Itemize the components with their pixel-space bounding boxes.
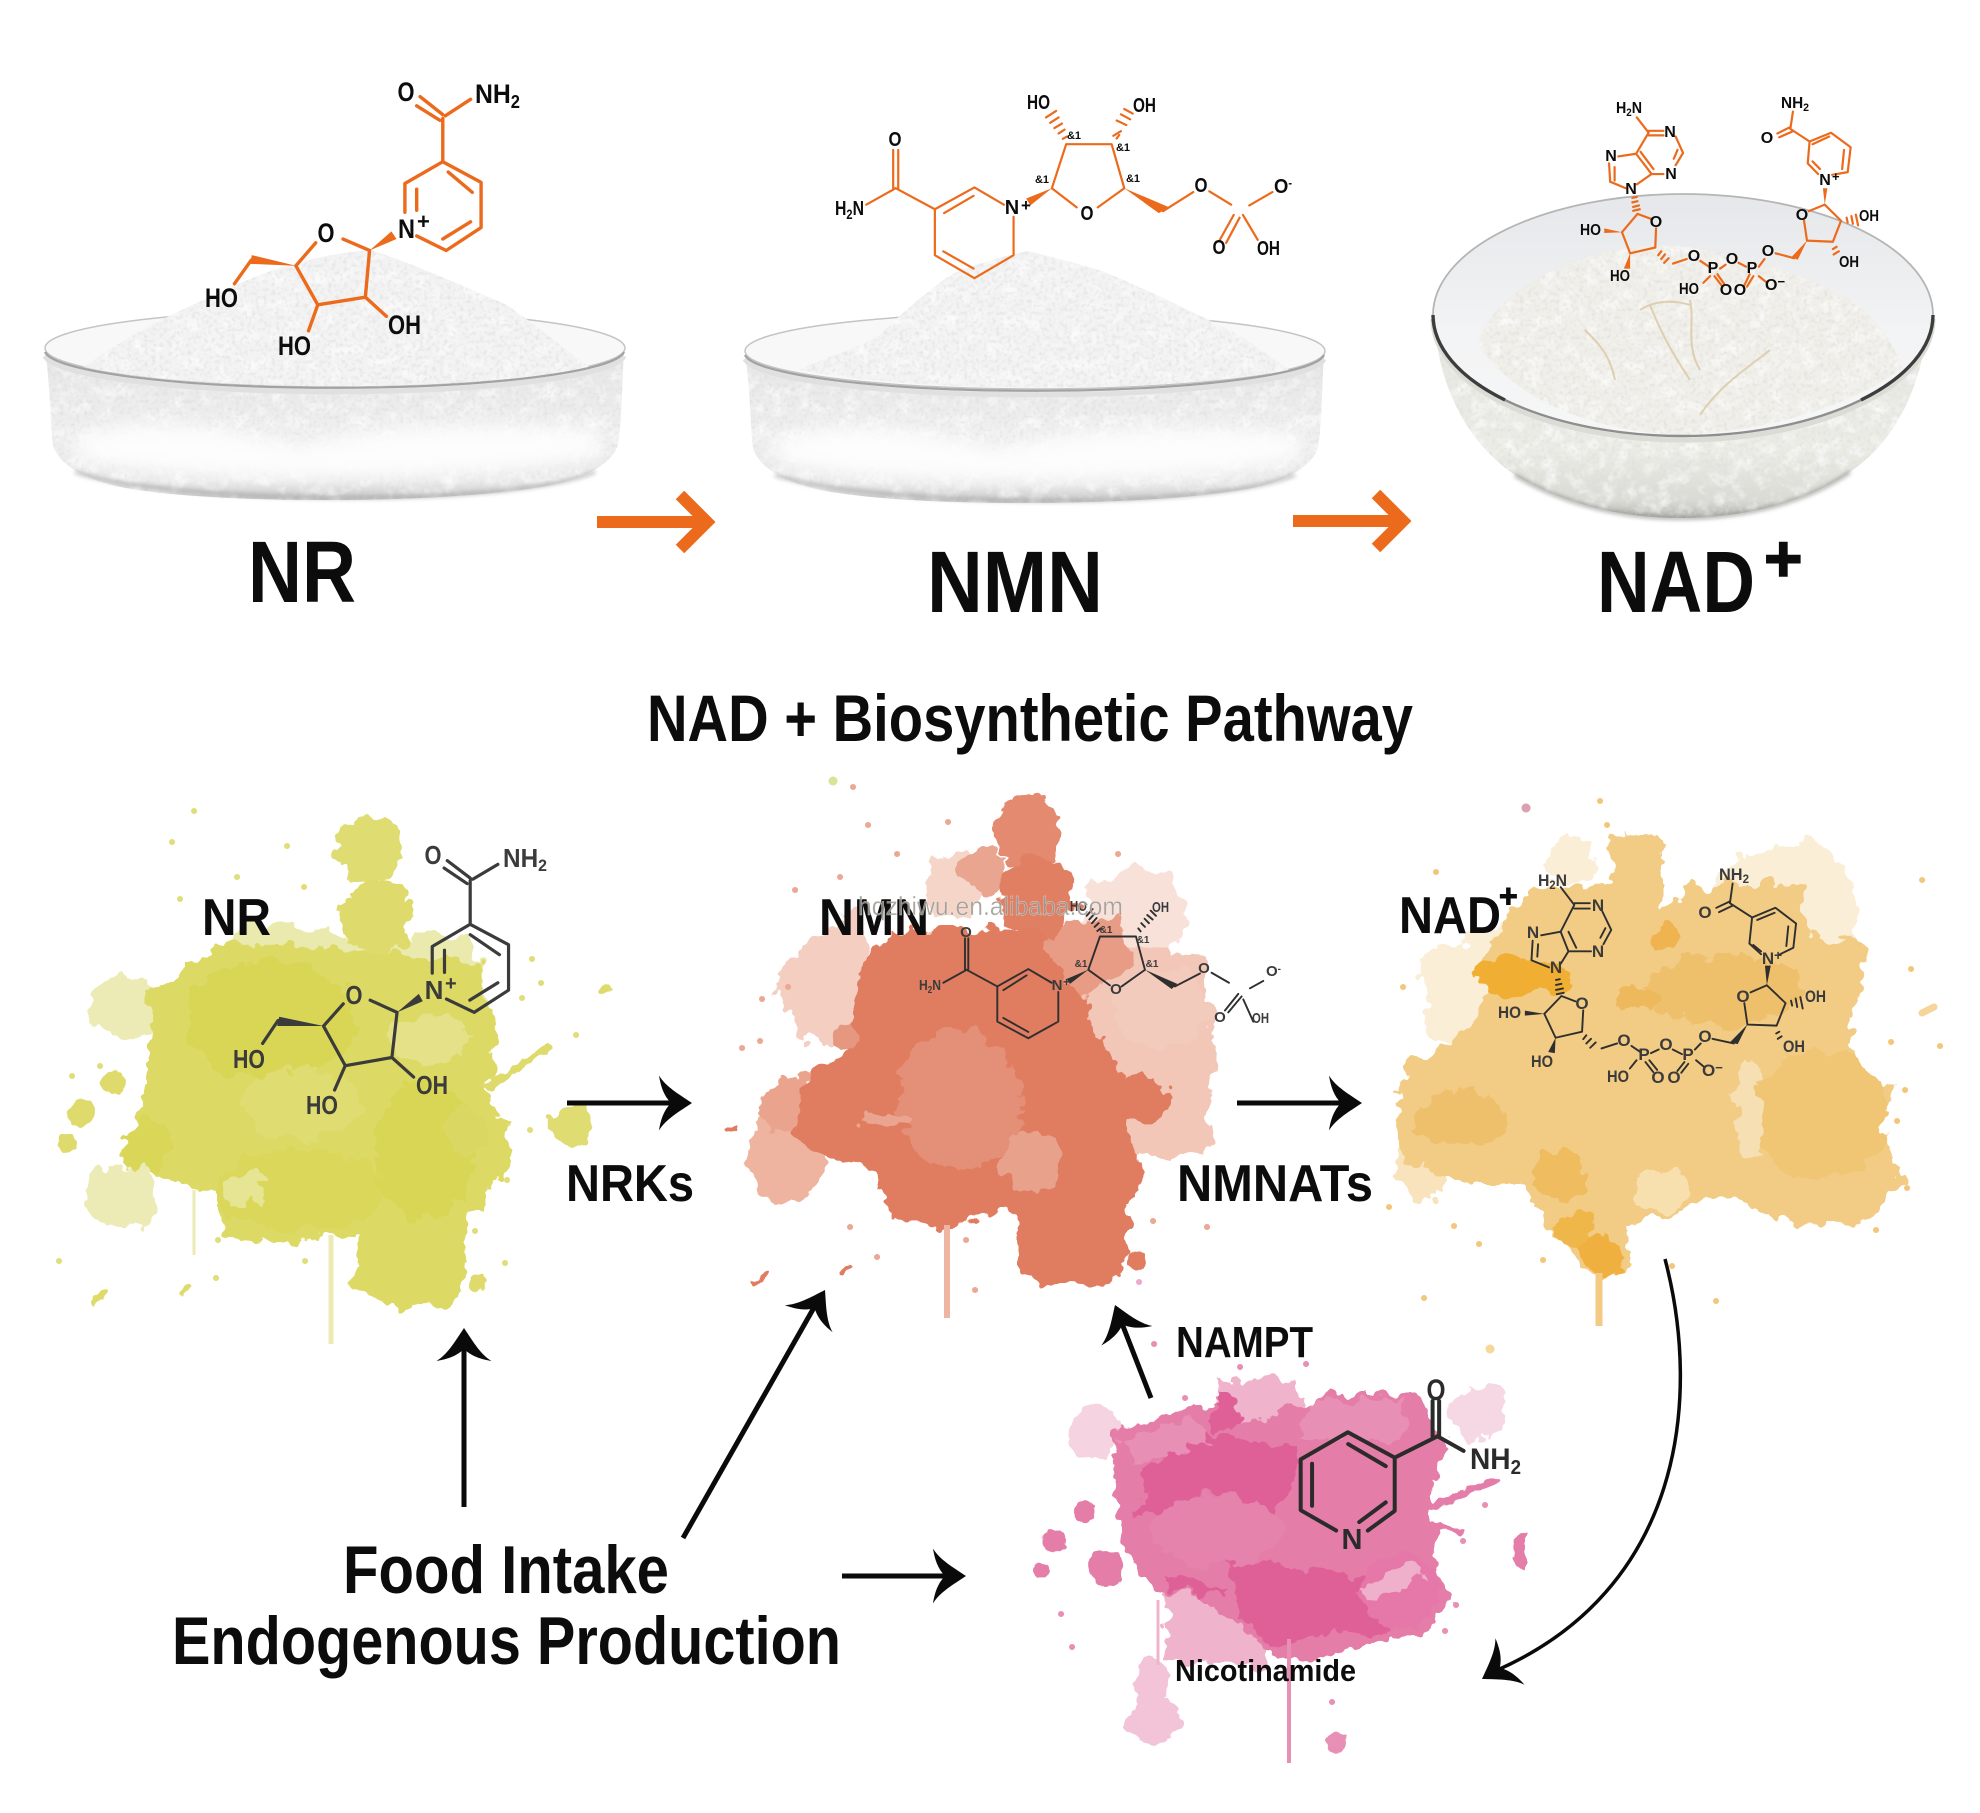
label: NAD+: NAD xyxy=(1399,887,1501,945)
molecule: NMN dark structure: &1 xyxy=(1137,935,1150,946)
panel: NR powder dish xyxy=(45,250,625,500)
text: Food Intake / Endogenous Production: Food Intake xyxy=(343,1532,669,1608)
molecule: NAD+ dark structure: H xyxy=(1538,871,1550,890)
molecule: NAD+ dark structure: O xyxy=(1698,1027,1712,1046)
molecule: NAD+ dark structure: + xyxy=(1774,947,1782,963)
molecule: NAD+ orange structure: N xyxy=(1819,172,1831,189)
molecule: NAD+ orange structure: H xyxy=(1616,100,1628,117)
splash: orange ink xyxy=(1389,801,1940,1326)
molecule: NMN orange structure: &1 xyxy=(1067,130,1081,142)
molecule: NAD+ orange structure: N xyxy=(1665,166,1677,183)
molecule: Nicotinamide structure: N xyxy=(1342,1524,1362,1556)
molecule: NR orange structure: O xyxy=(318,218,334,248)
molecule: NAD+ dark structure: HO xyxy=(1531,1052,1553,1071)
molecule: NAD+ orange structure: + xyxy=(1832,169,1840,184)
splash: salmon ink xyxy=(727,781,1215,1318)
molecule: NAD+ orange structure xyxy=(1580,95,1879,299)
heading: NMN: NMN xyxy=(927,534,1103,631)
molecule: NR dark structure xyxy=(233,840,547,1120)
molecule: NMN orange structure: O xyxy=(1194,175,1208,197)
molecule: NAD+ dark structure: O xyxy=(1736,987,1750,1006)
molecule: NAD+ dark structure: O xyxy=(1659,1035,1673,1054)
molecule: NAD+ orange structure: P xyxy=(1747,260,1758,277)
molecule: NAD+ orange structure: O xyxy=(1734,282,1746,299)
text: Food Intake / Endogenous Production: Endogenous Production xyxy=(172,1603,841,1679)
molecule: NAD+ orange structure: N xyxy=(1625,181,1637,198)
label: NMN: NMN xyxy=(819,889,929,947)
molecule: NAD+ dark structure: O xyxy=(1667,1068,1681,1087)
label: NMNATs: NMNATs xyxy=(1177,1155,1373,1213)
molecule: NR dark structure: OH xyxy=(416,1070,448,1100)
molecule: NMN dark structure: O xyxy=(1198,960,1210,977)
molecule: NR orange structure: + xyxy=(417,209,430,234)
molecule: NR orange structure: OH xyxy=(388,310,421,340)
molecule: Nicotinamide structure: NH xyxy=(1470,1443,1513,1476)
molecule: NAD+ orange structure: N xyxy=(1605,148,1617,165)
molecule: NAD+ orange structure: O xyxy=(1765,277,1777,294)
molecule: NAD+ orange structure: O xyxy=(1650,214,1662,231)
molecule: NAD+ dark structure: O xyxy=(1575,994,1589,1013)
molecule: NMN dark structure: O xyxy=(1110,981,1122,998)
molecule: NAD+ dark structure: OH xyxy=(1805,987,1826,1006)
arrow: Food Intake up to NR xyxy=(436,1328,492,1507)
molecule: NR orange structure: NH xyxy=(475,79,514,109)
molecule: NMN dark structure: N xyxy=(1052,977,1062,994)
molecule: NR dark structure: HO xyxy=(233,1044,265,1074)
molecule: NMN orange structure: + xyxy=(1021,196,1031,215)
molecule: NAD+ dark structure: P xyxy=(1682,1045,1694,1064)
molecule: NAD+ orange structure: HO xyxy=(1679,281,1699,298)
molecule: NMN dark structure: &1 xyxy=(1146,959,1159,970)
molecule: NAD+ dark structure: N xyxy=(1556,871,1567,890)
panel: NAD+ powder dish xyxy=(1433,194,1933,518)
molecule: NAD+ orange structure: 2 xyxy=(1803,102,1809,114)
molecule: NR dark structure: HO xyxy=(306,1090,338,1120)
molecule: NMN orange structure: N xyxy=(853,198,864,220)
molecule: NMN orange structure: O xyxy=(1212,237,1226,259)
molecule: NR orange structure xyxy=(205,77,520,361)
heading: NAD+: + xyxy=(1764,521,1803,595)
arrow: Nicotinamide to NMN via NAMPT xyxy=(1089,1295,1152,1398)
molecule: NAD+ dark structure: OH xyxy=(1783,1037,1805,1056)
molecule: NMN orange structure: OH xyxy=(1257,238,1280,260)
molecule: NAD+ orange structure: 2 xyxy=(1626,107,1632,119)
label: NR: NR xyxy=(202,889,271,947)
molecule: NAD+ orange structure: P xyxy=(1708,260,1719,277)
molecule: NAD+ dark structure: N xyxy=(1527,923,1539,942)
molecule: NMN orange structure: O xyxy=(888,129,902,151)
molecule: NR dark structure: N xyxy=(425,975,443,1005)
molecule: NMN orange structure: HO xyxy=(1027,92,1050,114)
molecule: NAD+ dark structure: N xyxy=(1550,958,1562,977)
molecule: NMN dark structure: &1 xyxy=(1100,925,1113,936)
molecule: NAD+ orange structure: NH xyxy=(1781,95,1804,112)
molecule: NMN orange structure: &1 xyxy=(1035,174,1049,186)
molecule: NAD+ orange structure: O xyxy=(1762,243,1774,260)
molecule: NR orange structure: N xyxy=(398,214,415,244)
molecule: NMN orange structure: O xyxy=(1080,203,1094,225)
molecule: NR dark structure: + xyxy=(445,973,457,995)
heading: NAD+: NAD xyxy=(1597,534,1755,631)
molecule: NR orange structure: 2 xyxy=(511,92,520,112)
molecule: NAD+ dark structure: 2 xyxy=(1549,878,1556,892)
splash: yellow-green ink xyxy=(59,811,609,1344)
molecule: NMN dark structure: &1 xyxy=(1075,959,1088,970)
molecule: NR dark structure: O xyxy=(346,980,362,1010)
arrow: NAD+ back to Nicotinamide xyxy=(1467,1259,1680,1702)
molecule: NAD+ orange structure: O xyxy=(1726,251,1738,268)
molecule: NAD+ dark structure: NH xyxy=(1719,865,1744,884)
panel: NR splash xyxy=(59,811,609,1344)
molecule: NAD+ orange structure: HO xyxy=(1610,268,1630,285)
title: NAD + Biosynthetic Pathway xyxy=(647,681,1413,755)
molecule: NAD+ dark structure xyxy=(1498,865,1826,1087)
arrow: NMN to NAD+ orange xyxy=(1293,494,1403,548)
molecule: NMN orange structure: &1 xyxy=(1116,142,1130,154)
molecule: NAD+ dark structure: N xyxy=(1592,896,1604,915)
molecule: NAD+ orange structure: N xyxy=(1632,100,1642,117)
arrow: NR to NMN orange xyxy=(597,495,707,549)
text: Food Intake / Endogenous Production xyxy=(172,1532,841,1679)
molecule: NAD+ orange structure: O xyxy=(1688,248,1700,265)
molecule: NMN orange structure: N xyxy=(1005,197,1019,219)
panel: Nicotinamide splash xyxy=(1033,1344,1526,1763)
molecule: NAD+ orange structure: OH xyxy=(1839,254,1859,271)
panel: NMN splash xyxy=(727,781,1281,1318)
molecule: NR orange structure: HO xyxy=(278,331,311,361)
molecule: NAD+ dark structure: 2 xyxy=(1743,872,1749,886)
molecule: NAD+ orange structure: O xyxy=(1761,130,1773,147)
molecule: Nicotinamide structure xyxy=(1301,1374,1521,1556)
molecule: NMN orange structure: H xyxy=(835,198,849,220)
molecule: NMN orange structure: 2 xyxy=(846,206,853,222)
molecule: NMN dark structure: 2 xyxy=(928,985,933,996)
arrow: Food Intake to Nicotinamide xyxy=(842,1548,966,1604)
molecule: Nicotinamide structure: 2 xyxy=(1511,1457,1521,1479)
molecule: NAD+ orange structure: O xyxy=(1796,207,1808,224)
splash: pink ink xyxy=(1033,1344,1526,1763)
molecule: NAD+ dark structure: O xyxy=(1698,903,1712,922)
molecule: NR orange structure: HO xyxy=(205,283,238,313)
molecule: NR dark structure: 2 xyxy=(538,856,547,875)
molecule: NAD+ orange structure: O xyxy=(1720,282,1732,299)
molecule: NMN dark structure: O xyxy=(1214,1009,1226,1026)
arrow: NR to NMN via NRKs xyxy=(567,1076,692,1130)
molecule: NMN orange structure: OH xyxy=(1133,95,1156,117)
molecule: NR orange structure: O xyxy=(398,77,414,107)
molecule: NAD+ dark structure: − xyxy=(1715,1060,1723,1075)
panel: NAD+ splash xyxy=(1389,801,1940,1326)
molecule: NMN orange structure: - xyxy=(1288,176,1292,190)
label: NAMPT: NAMPT xyxy=(1176,1318,1313,1367)
molecule: NMN dark structure: O xyxy=(1266,963,1278,980)
molecule: NAD+ orange structure: HO xyxy=(1580,222,1601,239)
molecule: NAD+ orange structure: − xyxy=(1777,274,1785,289)
molecule: NAD+ dark structure: N xyxy=(1592,942,1604,961)
molecule: NR dark structure: O xyxy=(424,840,442,870)
label: Nicotinamide: Nicotinamide xyxy=(1175,1653,1356,1688)
panel: NMN powder dish xyxy=(745,251,1325,503)
heading: NR: NR xyxy=(248,524,356,621)
molecule: NR dark structure: NH xyxy=(503,843,541,873)
molecule: NAD+ dark structure: O xyxy=(1651,1068,1665,1087)
molecule: Nicotinamide structure: O xyxy=(1426,1374,1446,1407)
label: NAD+: + xyxy=(1499,878,1518,914)
molecule: NAD+ dark structure: HO xyxy=(1607,1067,1629,1086)
molecule: NAD+ dark structure: O xyxy=(1702,1061,1715,1080)
molecule: NMN orange structure xyxy=(835,92,1292,278)
molecule: NAD+ dark structure: HO xyxy=(1498,1003,1521,1022)
molecule: NMN dark structure: + xyxy=(1063,975,1070,989)
molecule: NAD+ orange structure: OH xyxy=(1859,208,1879,225)
molecule: NAD+ dark structure: N xyxy=(1762,949,1774,968)
molecule: NMN dark structure: N xyxy=(932,977,941,994)
molecule: NMN dark structure: H xyxy=(919,977,930,994)
molecule: NAD+ dark structure: P xyxy=(1638,1045,1650,1064)
watermark: hqzhiwu.en.alibaba.com xyxy=(858,891,1123,921)
molecule: NAD+ dark structure: O xyxy=(1617,1031,1631,1050)
molecule: NMN dark structure: OH xyxy=(1252,1010,1269,1027)
molecule: NMN dark structure: O xyxy=(960,924,972,941)
molecule: NMN orange structure: O xyxy=(1274,176,1290,198)
arrow: Food Intake to NMN xyxy=(683,1276,849,1538)
molecule: NMN dark structure: OH xyxy=(1152,899,1169,916)
molecule: NMN dark structure xyxy=(919,898,1281,1038)
molecule: NMN dark structure: - xyxy=(1278,964,1281,975)
molecule: NAD+ orange structure: N xyxy=(1664,124,1676,141)
arrow: NMN to NAD+ via NMNATs xyxy=(1237,1076,1362,1130)
molecule: NMN orange structure: &1 xyxy=(1126,173,1140,185)
label: NRKs: NRKs xyxy=(566,1155,694,1213)
molecule: NMN dark structure: HO xyxy=(1070,898,1087,915)
